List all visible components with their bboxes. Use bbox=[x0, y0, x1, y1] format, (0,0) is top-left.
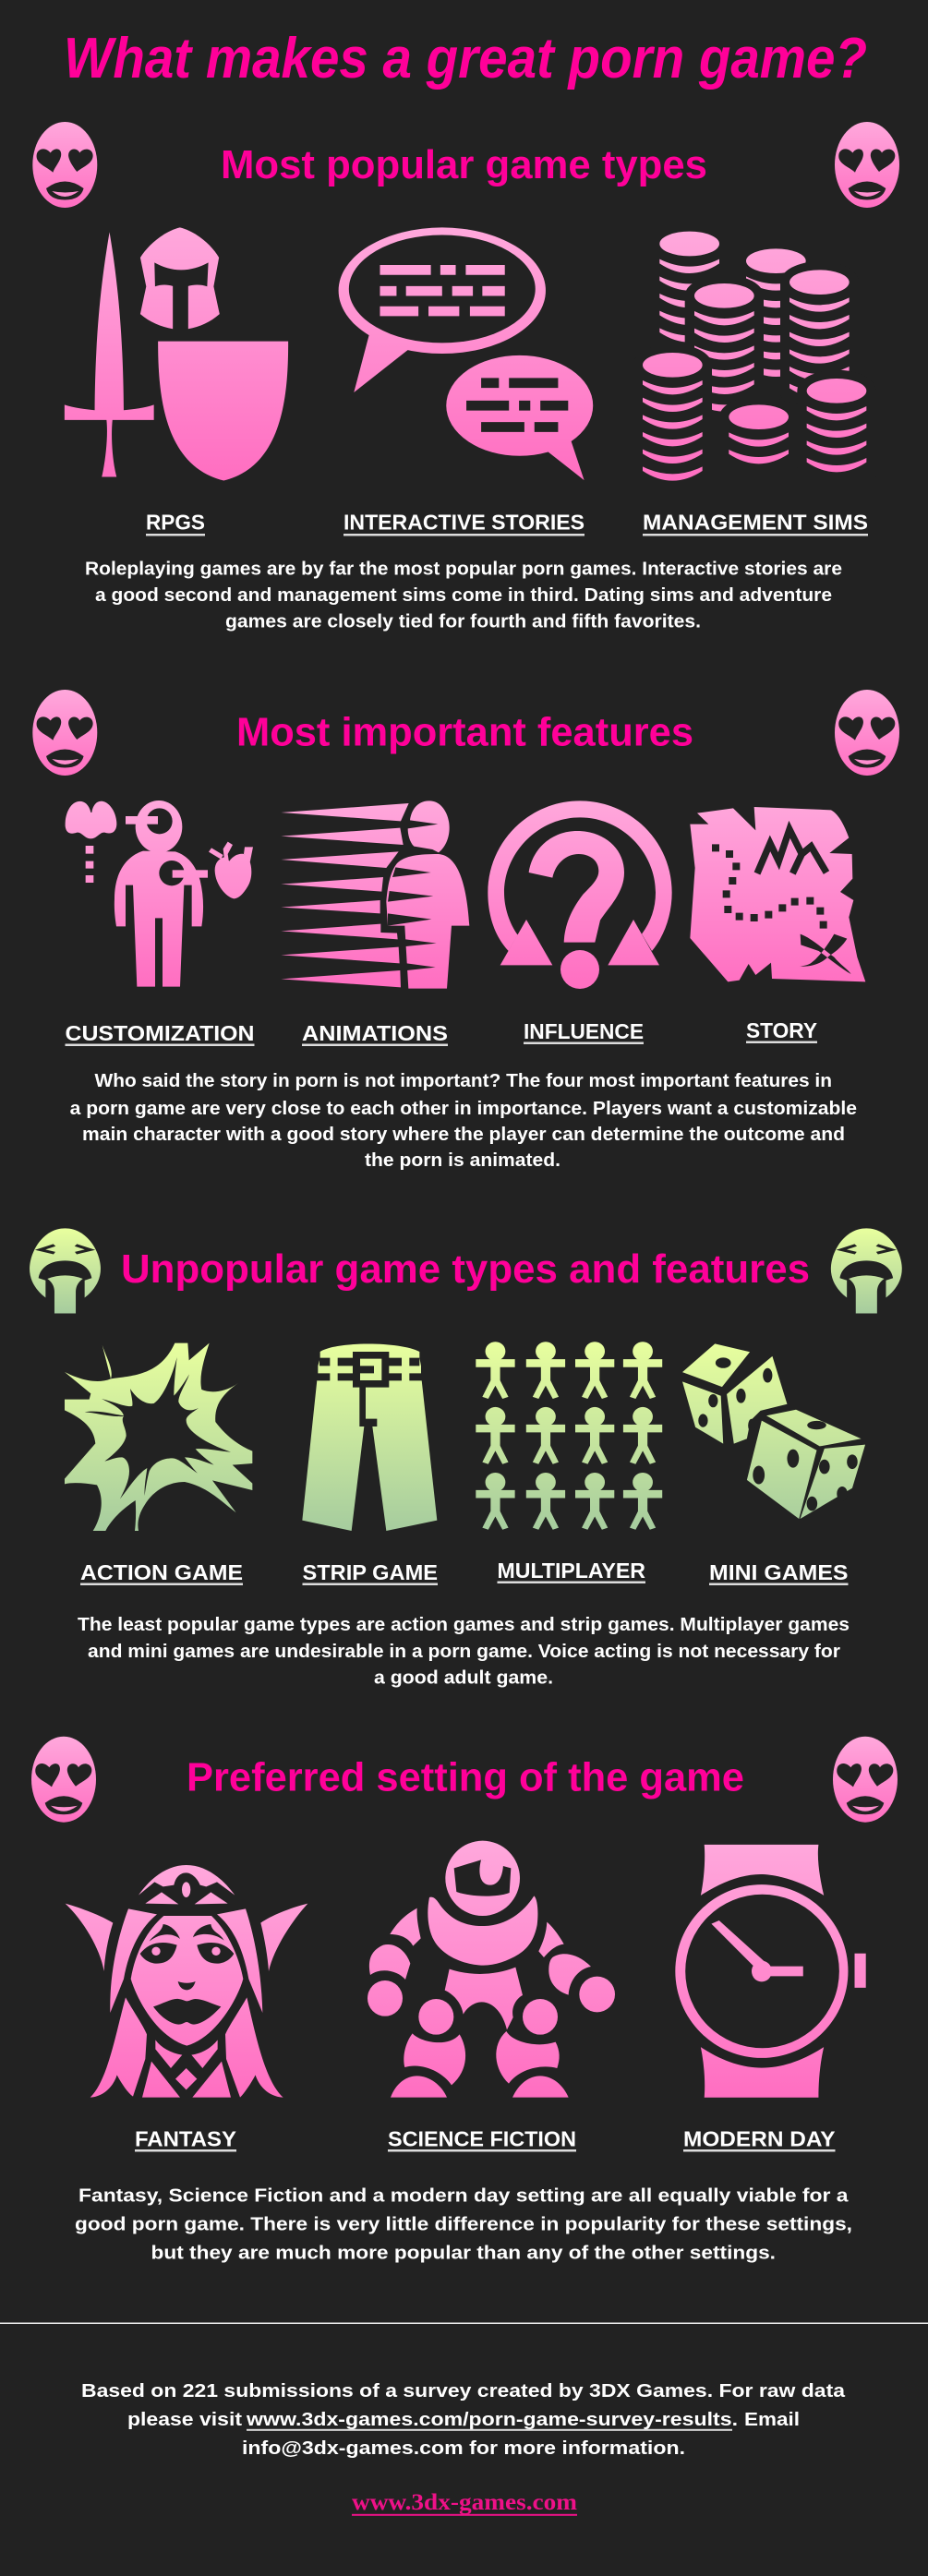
footer: survey source note bbox=[81, 2381, 846, 2459]
icon: love face left bbox=[32, 690, 97, 776]
icon: story treasure map bbox=[690, 807, 865, 981]
panel: preferred setting of the game bbox=[31, 1737, 898, 2264]
label: RPGs: RPGS bbox=[146, 510, 205, 534]
icon: science fiction robot bbox=[368, 1841, 615, 2098]
text block: unpopular description bbox=[78, 1615, 850, 1688]
icon: fantasy elf bbox=[66, 1865, 307, 2098]
footer: survey source note: please visit bbox=[127, 2410, 242, 2430]
icon: love face right bbox=[835, 690, 899, 776]
label: modern day: MODERN DAY bbox=[683, 2127, 835, 2151]
footer: survey source note: info@3dx-games.com for more information. bbox=[242, 2438, 685, 2459]
footer: survey source note: Email bbox=[744, 2410, 800, 2430]
label: animations: ANIMATIONS bbox=[302, 1021, 448, 1045]
icon: sick face right bbox=[831, 1228, 902, 1313]
footer: website link: www.3dx-games.com bbox=[352, 2490, 577, 2515]
icon: love face right bbox=[833, 1737, 898, 1823]
title: What makes a great porn game? bbox=[64, 27, 867, 90]
label: science fiction: SCIENCE FICTION bbox=[388, 2127, 576, 2151]
icon: speech bubbles bbox=[339, 227, 593, 480]
text block: unpopular description: and mini games are undesirable in a porn game. Voice acting is not necessary for bbox=[88, 1642, 840, 1662]
icon: love face right bbox=[835, 122, 899, 208]
icon: love face left bbox=[32, 122, 97, 208]
icon: customization figure with brain and heart bbox=[66, 800, 253, 987]
panel: unpopular game types and features bbox=[30, 1228, 902, 1688]
text block: features description: main character with a good story where the player can determine the outcome and bbox=[82, 1125, 845, 1145]
text block: setting description: Fantasy, Science Fiction and a modern day setting are all equally viable for a bbox=[78, 2186, 850, 2207]
icon: modern day wristwatch bbox=[675, 1845, 866, 2098]
icon: multiplayer crowd bbox=[476, 1342, 662, 1530]
text block: game types description: Roleplaying games are by far the most popular porn games. Interactive stories are bbox=[85, 560, 842, 580]
icon: animations figure with motion spikes bbox=[281, 800, 469, 989]
panel: most important features bbox=[32, 690, 899, 1171]
label: multiplayer: MULTIPLAYER bbox=[497, 1559, 645, 1583]
heading: unpopular game types and features: Unpopular game types and features bbox=[121, 1246, 810, 1292]
label: mini games: MINI GAMES bbox=[709, 1560, 848, 1584]
label: strip game: STRIP GAME bbox=[303, 1560, 438, 1584]
label: story: STORY bbox=[746, 1018, 817, 1042]
label: action game: ACTION GAME bbox=[80, 1560, 243, 1584]
label: influence: INFLUENCE bbox=[524, 1019, 644, 1043]
icon: strip game pants bbox=[302, 1344, 437, 1531]
heading: preferred setting of the game: Preferred setting of the game bbox=[187, 1754, 744, 1800]
heading: most important features: Most important features bbox=[236, 709, 693, 755]
text block: features description: a porn game are very close to each other in importance. Players want a customizable bbox=[70, 1099, 857, 1119]
text block: setting description bbox=[75, 2186, 852, 2264]
text block: unpopular description: The least popular game types are action games and strip games. Multiplayer games bbox=[78, 1615, 850, 1635]
text block: setting description: but they are much more popular than any of the other settings. bbox=[151, 2244, 776, 2264]
text block: setting description: good porn game. There is very little difference in popularity for these settings, bbox=[75, 2214, 852, 2234]
icon: influence question mark with arrows bbox=[488, 800, 672, 989]
icon: RPG sword, helmet and shield bbox=[65, 227, 288, 481]
text block: game types description: a good second and management sims come in third. Dating sims and adventure bbox=[95, 585, 832, 606]
text block: game types description: games are closely tied for fourth and fifth favorites. bbox=[225, 611, 701, 632]
text block: features description: Who said the story in porn is not important? The four most important features in bbox=[94, 1071, 832, 1091]
icon: sick face left bbox=[30, 1228, 101, 1313]
heading: most popular game types: Most popular game types bbox=[221, 142, 707, 187]
icon: coin stacks bbox=[633, 232, 876, 483]
label: interactive stories: INTERACTIVE STORIES bbox=[343, 510, 585, 534]
footer: survey source note: www.3dx-games.com/porn-game-survey-results. bbox=[246, 2410, 738, 2430]
text block: features description: the porn is animated. bbox=[365, 1150, 560, 1171]
icon: mini games dice bbox=[682, 1343, 865, 1519]
label: management sims: MANAGEMENT SIMS bbox=[643, 510, 868, 534]
label: fantasy: FANTASY bbox=[135, 2127, 236, 2151]
label: customization: CUSTOMIZATION bbox=[65, 1021, 255, 1045]
icon: action explosion bbox=[65, 1343, 252, 1531]
text block: unpopular description: a good adult game. bbox=[374, 1667, 553, 1688]
text block: game types description bbox=[85, 560, 842, 632]
text block: features description bbox=[70, 1071, 857, 1171]
footer: survey source note: Based on 221 submissions of a survey created by 3DX Games. For raw data bbox=[81, 2381, 846, 2401]
panel: most popular game types bbox=[32, 122, 899, 632]
icon: love face left bbox=[31, 1737, 96, 1823]
